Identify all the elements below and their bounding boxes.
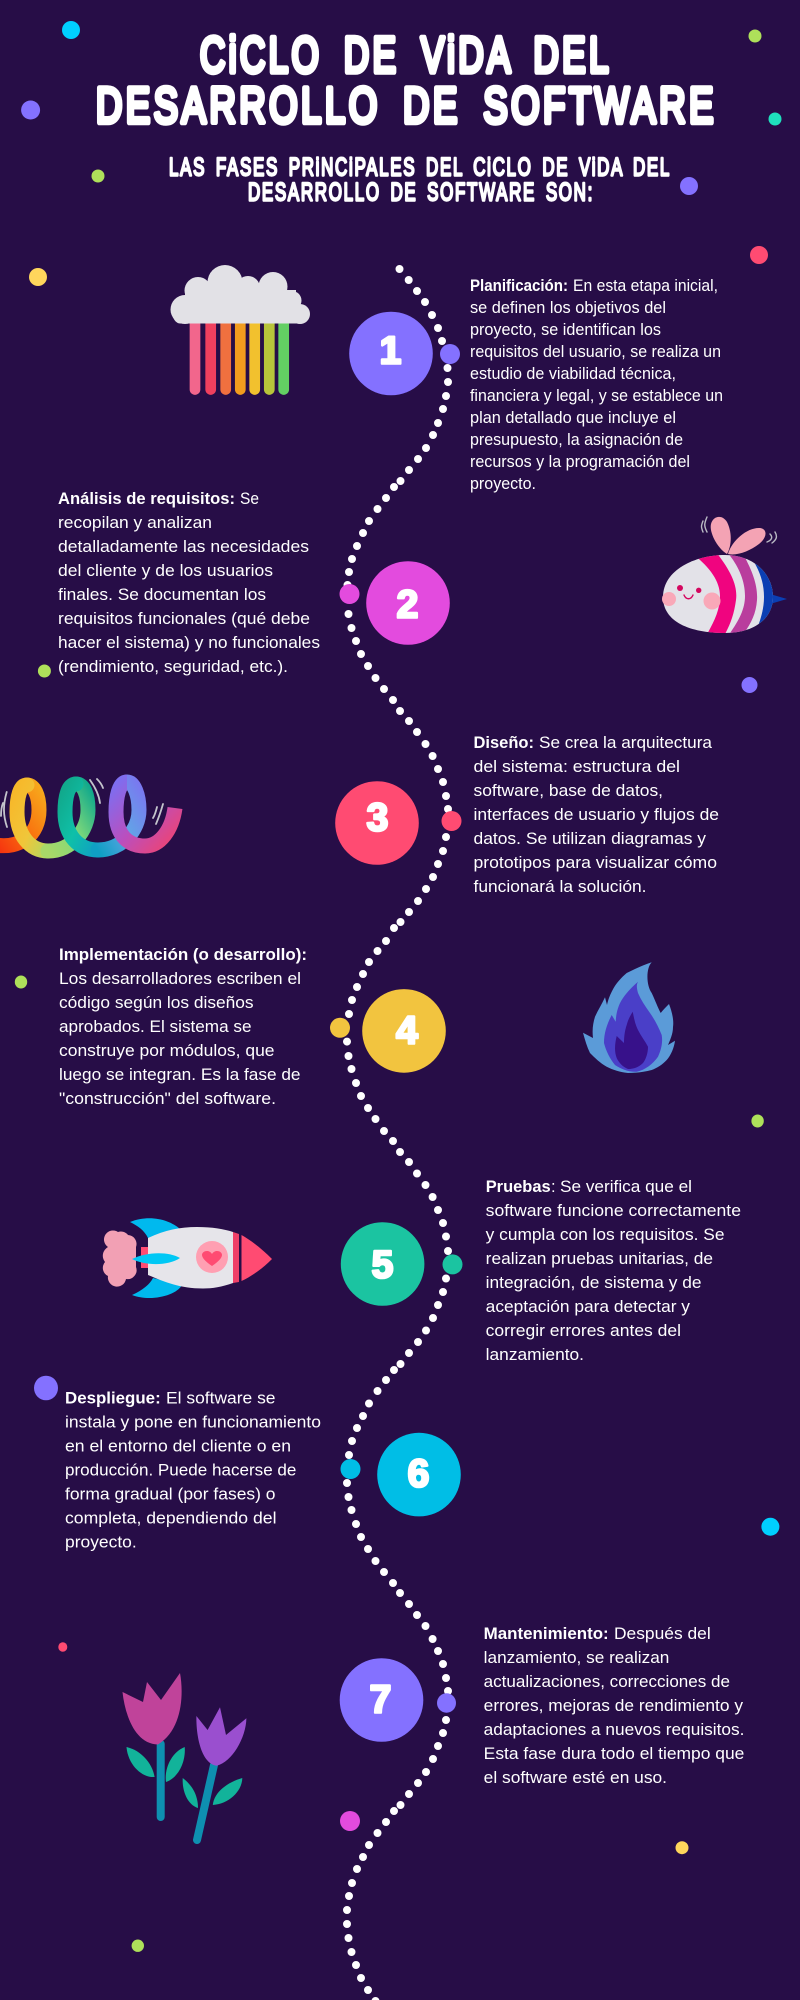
step 7 marker dot [437,1693,456,1713]
text block: Despliegue: proyecto. [65,1534,137,1552]
text block: Planificación: requisitos del usuario, se realiza un [470,343,721,361]
icon: rainbow cloud [170,265,310,390]
text block: Implementación: "construcción" del software. [59,1090,276,1108]
text block: Análisis de requisitos: requisitos funcionales (qué debe [58,610,310,628]
text block: Implementación: Los desarrolladores escriben el [59,970,301,988]
text block: Análisis de requisitos: del cliente y de los usuarios [58,562,273,580]
text block: Implementación: código según los diseños [59,994,254,1012]
step 3 number circle: 3 [367,796,388,840]
text block: Pruebas: lanzamiento. [486,1346,584,1364]
subtitle: DESARROLLO DE SOFTWARE SON: [248,178,594,206]
text block: Mantenimiento [484,1625,744,1787]
step 7 number circle: 7 [370,1678,391,1722]
text block: Despliegue: completa, dependiendo del [65,1510,276,1528]
text block: Planificación: En esta etapa inicial, [573,277,718,295]
text block: Despliegue: Despliegue: [65,1390,161,1408]
text block: Diseño: prototipos para visualizar cómo [474,854,717,872]
step 5 marker dot [442,1254,462,1274]
step 1 number circle [349,312,433,395]
text block: Diseño: interfaces de usuario y flujos de [474,806,719,824]
text block: Planificación: estudio de viabilidad técnica, [470,365,676,383]
text block: Implementación: luego se integran. Es la fase de [59,1066,300,1084]
text block: Pruebas: : [551,1178,556,1196]
icon: rocket [103,1218,272,1298]
step 7 number circle [340,1658,423,1742]
subtitle [169,154,671,206]
text block: Diseño: Diseño: [474,734,534,752]
step 6 marker dot [340,1459,360,1479]
text block: Despliegue: producción. Puede hacerse de [65,1462,296,1480]
step 6 number circle: 6 [408,1452,429,1496]
icon: tulips [122,1673,246,1840]
icon: blue flame [583,962,675,1073]
text block: Pruebas: Pruebas [486,1178,551,1196]
text block: Pruebas: Se verifica que el [560,1178,692,1196]
text block: Pruebas [486,1178,741,1364]
text block: Planificación: proyecto. [470,475,536,493]
text block: Diseño: software, base de datos, [474,782,663,800]
text block: Mantenimiento: Después del [614,1625,711,1643]
text block: Planificación: se definen los objetivos del [470,299,666,317]
icon: bee [662,517,787,636]
step 2 number circle: 2 [397,584,418,626]
text block: Implementación: construye por módulos, que [59,1042,274,1060]
text block: Pruebas: corregir errores antes del [486,1322,681,1340]
text block: Análisis de requisitos: hacer el sistema) y no funcionales [58,634,320,652]
text block: Despliegue: instala y pone en funcionamiento [65,1414,321,1432]
text block: Implementación [59,946,307,1108]
text block: Planificación: recursos y la programación del [470,453,690,471]
text block: Despliegue: en el entorno del cliente o en [65,1438,291,1456]
text block: Planificación: proyecto, se identifican los [470,321,661,339]
step 3 marker dot [442,811,462,831]
step 4 marker dot [330,1018,350,1038]
step 2 marker dot [340,584,360,604]
text block: Mantenimiento: el software esté en uso. [484,1769,667,1787]
title [96,27,717,134]
step 3 number circle [335,781,419,865]
text block: Mantenimiento: adaptaciones a nuevos requisitos. [484,1721,744,1739]
text block: Diseño: Se crea la arquitectura [539,734,713,752]
step 2 number circle [366,561,450,645]
title: CiCLO DE ViDA DEL [200,27,612,83]
text block: Diseño: funcionará la solución. [474,878,646,896]
text block: Pruebas: integración, de sistema y de [486,1274,702,1292]
text block: Diseño: del sistema: estructura del [474,758,680,776]
text block: Pruebas: software funcione correctamente [486,1202,741,1220]
text block: Pruebas: aceptación para detectar y [486,1298,691,1316]
step 4 number circle: 4 [396,1010,418,1052]
text block: Planificación [470,277,723,493]
text block: Análisis de requisitos: finales. Se documentan los [58,586,266,604]
text block: Despliegue [65,1390,321,1552]
step 4 number circle [362,989,446,1073]
text block: Despliegue: El software se [166,1390,276,1408]
text block: Implementación: Implementación (o desarrollo): [59,946,307,964]
text block: Diseño: datos. Se utilizan diagramas y [474,830,707,848]
step 5 number circle [341,1222,424,1306]
text block: Implementación: aprobados. El sistema se [59,1018,252,1036]
text block: Mantenimiento: lanzamiento, se realizan [484,1649,669,1667]
text block: Análisis de requisitos: Se [240,490,259,508]
text block: Planificación: financiera y legal, y se establece un [470,387,723,405]
text block: Mantenimiento: Esta fase dura todo el tiempo que [484,1745,744,1763]
text block: Despliegue: forma gradual (por fases) o [65,1486,276,1504]
step 5 number circle: 5 [372,1244,393,1286]
text block: Pruebas: y cumpla con los requisitos. Se [486,1226,724,1244]
text block: Diseño [474,734,719,896]
step 6 number circle [377,1433,461,1516]
text block: Mantenimiento: Mantenimiento: [484,1625,609,1643]
text block: Planificación: presupuesto, la asignación de [470,431,683,449]
text block: Análisis de requisitos: recopilan y analizan [58,514,212,532]
dotted timeline path [347,269,448,2000]
text block: Análisis de requisitos: Análisis de requisitos: [58,490,235,508]
text block: Análisis de requisitos: detalladamente las necesidades [58,538,309,556]
text block: Pruebas: realizan pruebas unitarias, de [486,1250,713,1268]
text block: Planificación: Planificación: [470,277,568,295]
text block: Análisis de requisitos: (rendimiento, seguridad, etc.). [58,658,288,676]
step 1 marker dot [440,344,460,364]
text block: Planificación: plan detallado que incluye el [470,409,676,427]
text block: Análisis de requisitos [58,490,320,676]
text block: Mantenimiento: actualizaciones, correcciones de [484,1673,730,1691]
text block: Mantenimiento: errores, mejoras de rendimiento y [484,1697,744,1715]
icon: rainbow spiral [0,779,175,851]
step 1 number circle: 1 [380,330,401,372]
